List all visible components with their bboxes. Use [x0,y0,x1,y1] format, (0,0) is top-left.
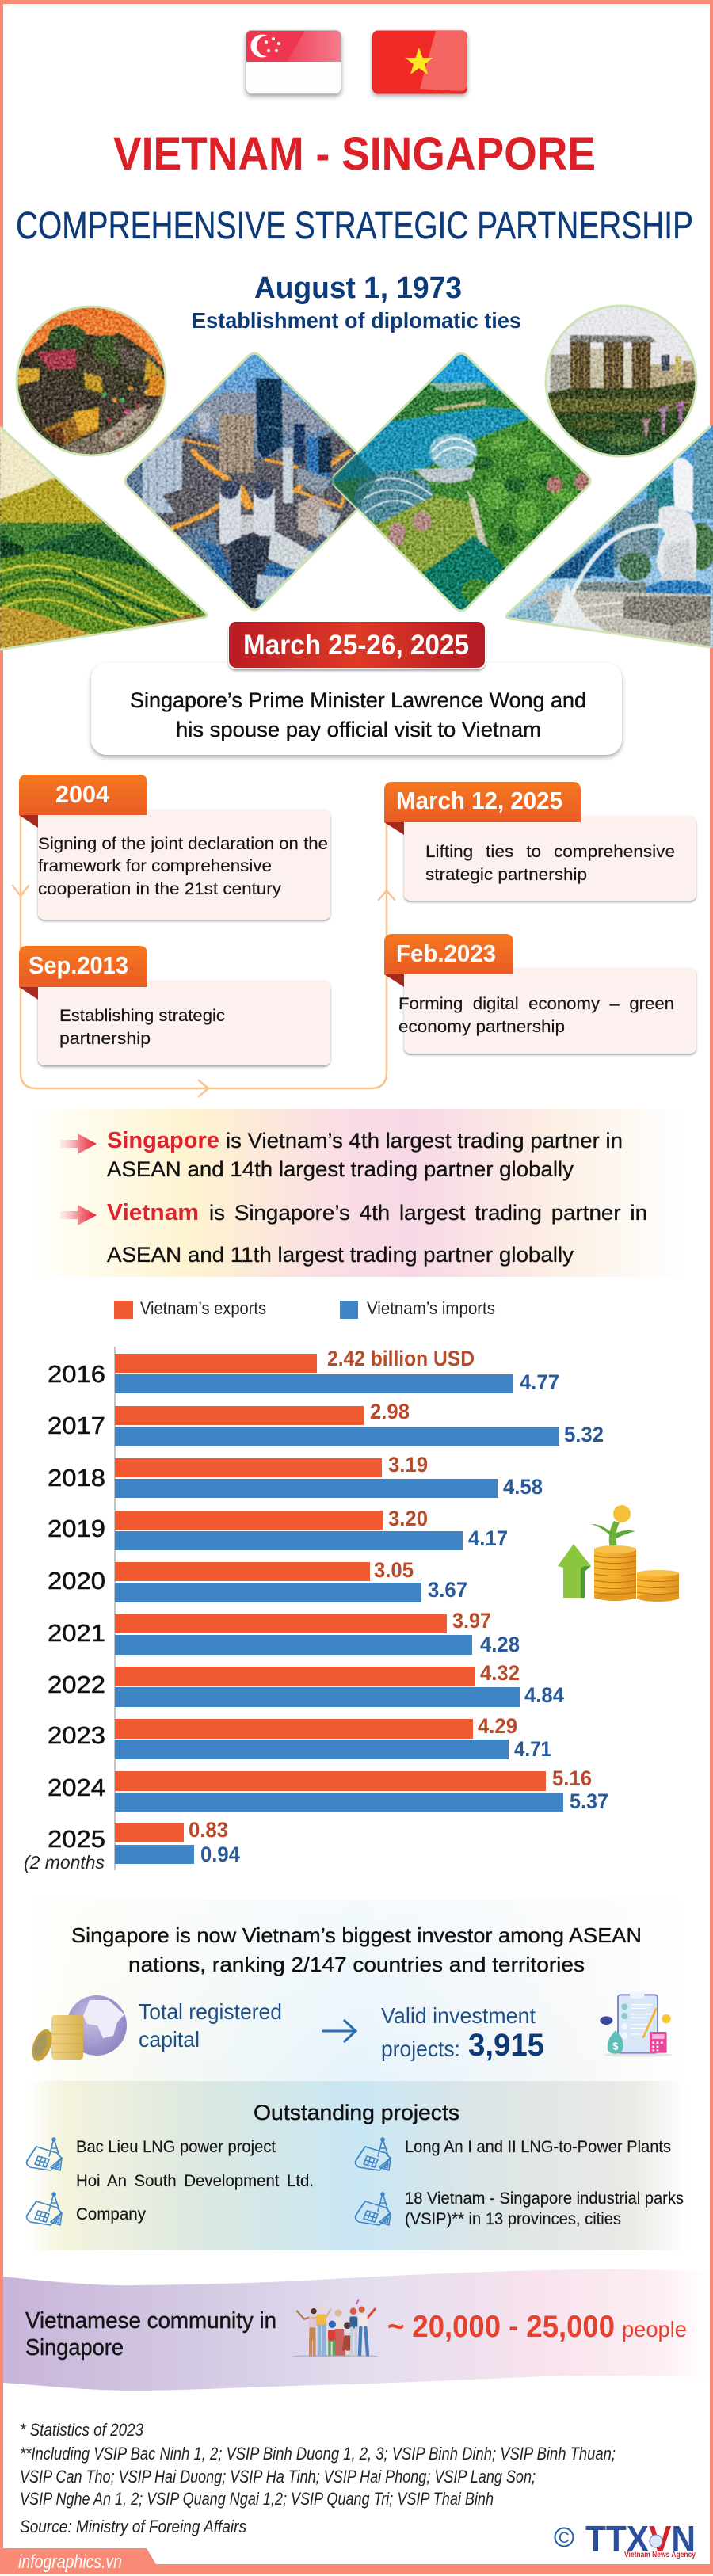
panel: Vietnamese community: ~ 20,000 - 25,000 [387,2310,615,2344]
panel: trade partner ranking: ASEAN and 11th largest trading partner globally [107,1243,574,1267]
import values [200,1370,608,1866]
logo: TTXVN: TTXVN [585,2518,696,2559]
panel: Vietnamese community [3,2269,710,2391]
panel: outstanding projects: Hoi An South Development Ltd. [76,2172,314,2190]
import values: 4.71 [514,1737,551,1761]
export values: 2.42 billion USD [327,1347,475,1370]
note: 2 months: (2 months [24,1852,105,1873]
callout: official visit: Singapore’s Prime Minister Lawrence Wong and [130,688,586,712]
callout: official visit [91,663,622,755]
panel: milestone Sep.2013 [19,946,330,1065]
photo: Hoi An old town [16,306,166,456]
year axis labels: 2016 [48,1360,105,1388]
legend [114,1298,495,1319]
legend: Vietnam’s imports [367,1298,495,1318]
footnotes: Source: Ministry of Foreing Affairs [20,2517,246,2536]
photo: Merlion triangle [499,420,713,654]
import values: 3.67 [428,1578,467,1602]
panel: milestone 2004: Signing of the joint declaration on the [38,835,328,853]
panel: trade partner ranking: is Singapore’s 4th largest trading partner in [209,1201,647,1225]
panel: milestone 2004 [19,775,330,920]
import values: 4.77 [520,1370,559,1394]
panel: outstanding projects: Company [76,2205,146,2224]
icon: clipboard [600,1991,672,2057]
year axis labels: 2020 [48,1567,105,1595]
icon: clipboard: $ [612,2041,618,2052]
timeline connector arrow [13,816,395,1096]
panel: trade partner ranking: ASEAN and 14th largest trading partner globally [107,1157,574,1181]
panel: outstanding projects [27,2081,687,2250]
panel: investment: 3,915 [468,2028,544,2063]
icon: red arrow 2 [60,1205,97,1225]
panel: milestone Sep.2013: partnership [59,1030,151,1048]
footnotes: VSIP Nghe An 1, 2; VSIP Quang Ngai 1,2; VSIP Quang Tri; VSIP Thai Binh [20,2489,494,2509]
date caption: Establishment of diplomatic ties [192,308,521,333]
icon: globe and coins [28,1995,127,2063]
import values: 5.37 [570,1789,608,1813]
panel: trade partner ranking: Vietnam [107,1200,199,1225]
import values: 4.58 [503,1475,543,1499]
legend: Vietnam’s exports [140,1298,266,1318]
panel: milestone March 12, 2025: strategic partnership [425,866,587,884]
panel: Vietnamese community: Singapore [25,2335,124,2361]
panel: milestone Feb.2023: Feb.2023 [396,939,496,967]
export values: 3.19 [388,1453,428,1477]
icon: Singapore flag [246,30,341,93]
export values: 3.97 [452,1609,491,1633]
callout: official visit: his spouse pay official visit to Vietnam [176,718,541,741]
panel: milestone 2004: framework for comprehensive [38,857,272,875]
icon: plan 2 [27,2193,62,2225]
title: VIETNAM - SINGAPORE [113,128,596,180]
date badge [228,622,486,669]
year axis labels: 2025 [48,1825,105,1853]
year axis labels: 2024 [48,1774,105,1801]
photo: rice terraces triangle [0,424,214,654]
icon: people group [292,2300,379,2357]
logo: TTXVN: C [559,2530,570,2547]
import values: 4.28 [480,1633,520,1656]
panel: Vietnamese community: Vietnamese community in [25,2308,276,2334]
year axis labels [48,1360,105,1853]
icon: Vietnam flag [372,30,467,93]
panel: milestone Feb.2023 [384,934,696,1054]
panel: trade partner ranking: is Vietnam’s 4th largest trading partner in [226,1129,623,1153]
year axis labels: 2023 [48,1721,105,1749]
panel: outstanding projects: Outstanding projects [254,2101,459,2124]
export values: 4.32 [480,1661,520,1685]
photo: Gardens by the Bay diamond [325,349,598,618]
bar chart: Vietnam Singapore trade [24,1347,608,1873]
panel: investment: projects: [381,2037,460,2061]
panel: trade partner ranking: Singapore [107,1128,219,1153]
export values: 3.05 [374,1558,414,1582]
panel: milestone Feb.2023: economy partnership [398,1018,565,1036]
date badge: March 25-26, 2025 [243,630,469,661]
year axis labels: 2018 [48,1464,105,1492]
panel: outstanding projects: (VSIP)** in 13 provinces, cities [405,2210,621,2228]
import values: 4.84 [524,1683,564,1707]
photo: Hanoi skyline diamond [124,352,358,612]
photo: Marina Bay Sands [543,301,701,459]
icon: plan 1 [27,2138,62,2170]
footnotes [20,2420,616,2536]
footer band [0,2548,713,2574]
year axis labels: 2021 [48,1619,105,1647]
panel: milestone Sep.2013: Sep.2013 [29,951,128,979]
panel: outstanding projects: Bac Lieu LNG power project [76,2138,276,2156]
icon: growing coins [558,1505,679,1602]
panel: investment: nations, ranking 2/147 countries and territories [128,1953,585,1976]
export values: 3.20 [388,1507,428,1530]
year axis labels: 2017 [48,1412,105,1439]
panel: investment: capital [139,2027,200,2052]
footnotes: VSIP Can Tho; VSIP Hai Duong; VSIP Ha Tinh; VSIP Hai Phong; VSIP Lang Son; [20,2467,536,2486]
icon: plan 3 [355,2138,391,2170]
export values [189,1347,592,1842]
panel: milestone Feb.2023: Forming digital economy – green [398,995,674,1013]
panel: trade partner ranking [28,1109,687,1277]
panel: outstanding projects: Long An I and II LNG-to-Power Plants [405,2138,671,2156]
panel: milestone 2004: 2004 [55,780,110,808]
import values: 4.17 [468,1526,508,1550]
date heading: August 1, 1973 [254,272,462,305]
panel: milestone March 12, 2025: March 12, 2025 [396,787,562,814]
panel: investment [28,1900,687,2081]
panel: investment: Valid investment [381,2003,536,2028]
panel: Vietnamese community: people [622,2317,687,2342]
export values: 0.83 [189,1818,228,1842]
export values: 2.98 [370,1400,410,1423]
panel: outstanding projects: 18 Vietnam - Singapore industrial parks [405,2189,684,2208]
arrow [322,2020,356,2042]
year axis labels: 2019 [48,1515,105,1542]
panel: milestone Sep.2013: Establishing strategic [59,1007,225,1025]
bars: imports [115,1374,563,1864]
panel: milestone 2004: cooperation in the 21st century [38,880,282,898]
import values: 5.32 [564,1423,604,1446]
export values: 4.29 [478,1714,517,1738]
export values: 5.16 [552,1766,592,1790]
panel: investment: Total registered [139,1999,282,2024]
icon: plan 4 [355,2193,391,2225]
footnotes: **Including VSIP Bac Ninh 1, 2; VSIP Binh Duong 1, 2, 3; VSIP Binh Dinh; VSIP Binh Thuan; [20,2444,616,2464]
logo: TTXVN: Vietnam News Agency [624,2550,696,2559]
icon: red arrow 1 [60,1134,97,1154]
bars: exports [115,1354,546,1842]
footer band: infographics.vn [18,2551,122,2573]
footnotes: * Statistics of 2023 [20,2420,144,2440]
panel: milestone March 12, 2025: Lifting ties to comprehensive [425,843,675,861]
import values: 0.94 [200,1842,240,1866]
year axis labels: 2022 [48,1671,105,1698]
panel: milestone March 12, 2025 [384,782,696,901]
panel: investment: Singapore is now Vietnam’s biggest investor among ASEAN [71,1923,642,1947]
